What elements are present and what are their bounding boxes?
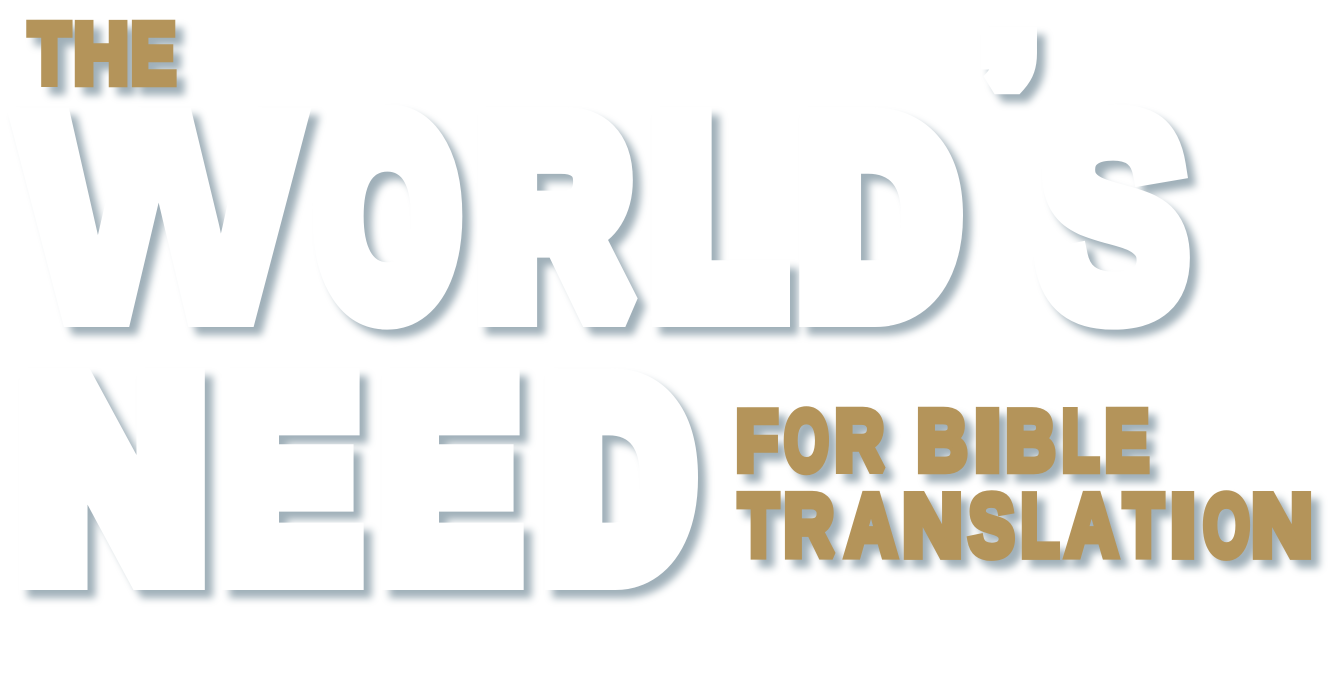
heading: FOR BIBLE: B [1006,394,1055,488]
heading: TRANSLATION: N [1251,477,1313,575]
heading: THE: T [29,7,70,102]
heading: FOR BIBLE: L [1062,393,1099,488]
heading: TRANSLATION: R [784,476,834,574]
heading: TRANSLATION: T [1124,477,1163,575]
heading: THE [29,6,176,102]
heading: WORLD'S: L [652,68,782,365]
heading: WORLD'S: O [318,69,457,366]
heading: NEED: E [222,330,357,629]
heading: TRANSLATION: I [1170,477,1196,575]
heading: THE: H [74,7,129,102]
heading: WORLD'S: W [18,52,303,381]
heading: NEED: D [545,329,692,629]
heading: TRANSLATION: L [1021,477,1059,575]
heading: TRANSLATION: N [902,478,962,575]
heading: WORLD'S: ’ [981,4,1037,182]
heading: WORLD'S: D [800,69,957,365]
heading: NEED [20,329,692,629]
heading: FOR BIBLE: O [784,393,829,489]
heading: THE: E [131,6,176,102]
heading: FOR BIBLE [736,393,1149,489]
heading: WORLD'S: R [478,68,630,365]
heading: WORLD'S [18,4,1187,381]
heading: TRANSLATION: O [1203,476,1250,574]
heading: FOR BIBLE: F [736,394,778,488]
heading: TRANSLATION: S [969,476,1014,575]
heading: FOR BIBLE: B [917,394,967,488]
heading: TRANSLATION: A [846,476,897,574]
heading: NEED: N [20,329,204,629]
heading: TRANSLATION [739,476,1313,575]
heading: WORLD'S: S [1039,62,1187,373]
heading: TRANSLATION: T [739,477,778,575]
heading: TRANSLATION: A [1066,476,1118,574]
heading: NEED: E [382,330,517,629]
heading: FOR BIBLE: E [1105,394,1149,489]
heading: FOR BIBLE: I [974,394,1001,489]
heading: FOR BIBLE: R [835,394,884,488]
